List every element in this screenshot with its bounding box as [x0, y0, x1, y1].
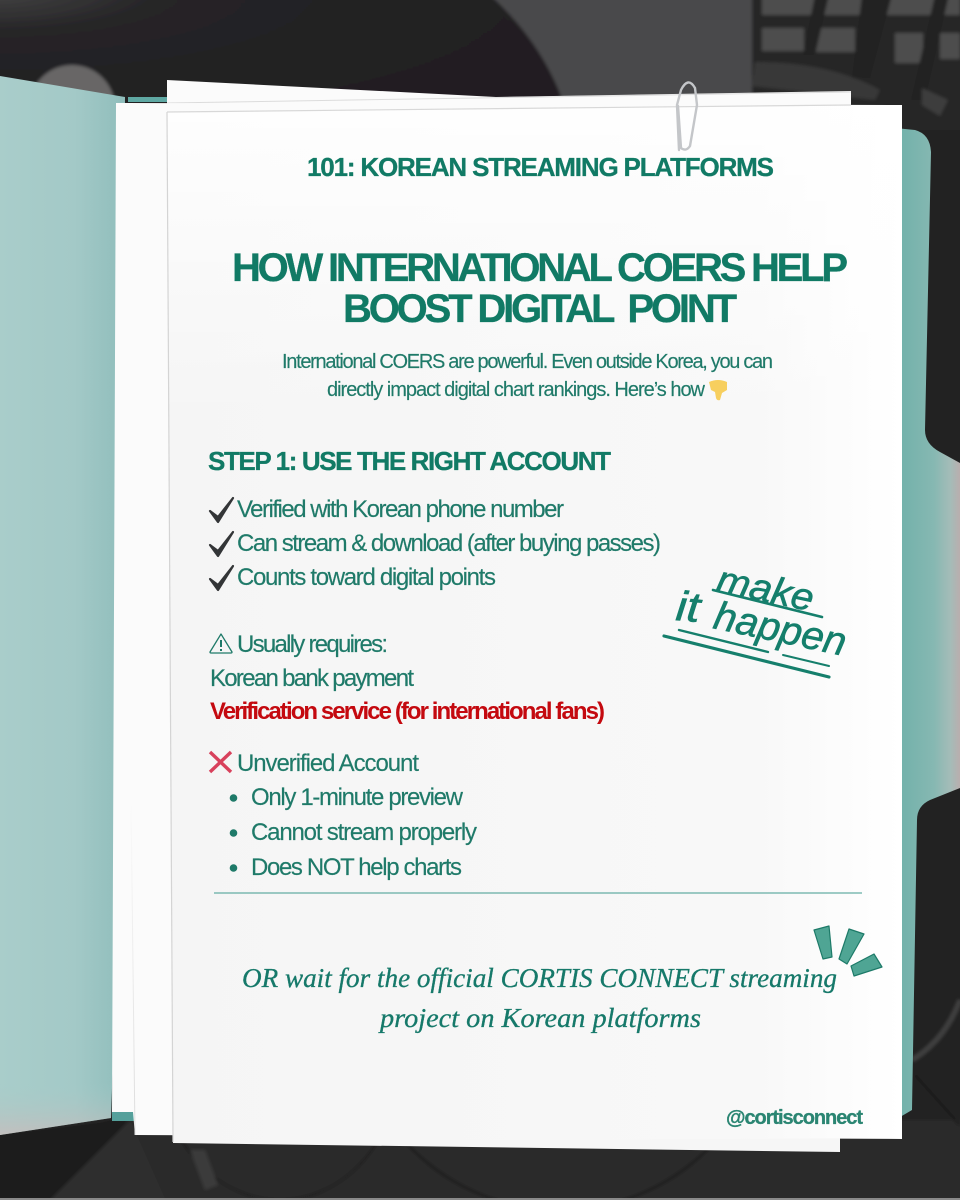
icon: red cross: [210, 752, 231, 772]
eyebrow heading: 101: KOREAN STREAMING PLATFORMS: [307, 152, 774, 182]
handle: @cortisconnect: [726, 1107, 863, 1129]
intro text: [282, 351, 773, 401]
unverified account block: Only 1-minute preview: [251, 784, 464, 811]
icon: paperclip: [677, 82, 697, 150]
icon: pointing down hand: [709, 380, 727, 400]
icon: burst marks: [814, 926, 882, 976]
intro text: directly impact digital chart rankings. Here’s how: [327, 379, 706, 401]
icon: check 1: [210, 498, 233, 522]
folder: left flap: [0, 76, 168, 1135]
unverified account block: Unverified Account: [237, 750, 419, 777]
main title: HOW INTERNATIONAL COERS HELP: [232, 246, 848, 290]
requirements block: Verification service (for international fans): [210, 698, 605, 725]
main title: [232, 246, 848, 331]
unverified account block: Does NOT help charts: [251, 854, 462, 881]
folder: right side with tab: [895, 128, 960, 1120]
handwritten sticker: make it happen: happen: [710, 594, 850, 665]
unverified account block: [210, 750, 477, 881]
verified checklist: Can stream & download (after buying passes): [237, 530, 661, 557]
handwritten sticker: make it happen: make: [713, 559, 818, 620]
verified checklist: Verified with Korean phone number: [237, 496, 564, 523]
unverified account block: Cannot stream properly: [251, 819, 477, 846]
icon: check 2: [210, 532, 233, 556]
paper stack: [112, 80, 902, 1152]
main title: BOOST DIGITAL POINT: [343, 287, 737, 331]
closing italic note: OR wait for the official CORTIS CONNECT streaming: [242, 963, 837, 993]
closing italic note: project on Korean platforms: [378, 1003, 701, 1033]
icon: warning triangle: [210, 634, 232, 653]
intro text: International COERS are powerful. Even outside Korea, you can: [282, 351, 773, 373]
closing italic note: [242, 963, 837, 1033]
requirements block: [210, 631, 605, 725]
requirements block: Korean bank payment: [210, 665, 414, 692]
verified checklist: [210, 496, 661, 591]
step heading: STEP 1: USE THE RIGHT ACCOUNT: [208, 446, 611, 476]
handwritten sticker: make it happen: [664, 559, 850, 677]
verified checklist: Counts toward digital points: [237, 564, 496, 591]
requirements block: Usually requires:: [237, 631, 388, 658]
handwritten sticker: make it happen: it: [674, 582, 705, 631]
icon: check 3: [210, 566, 233, 590]
